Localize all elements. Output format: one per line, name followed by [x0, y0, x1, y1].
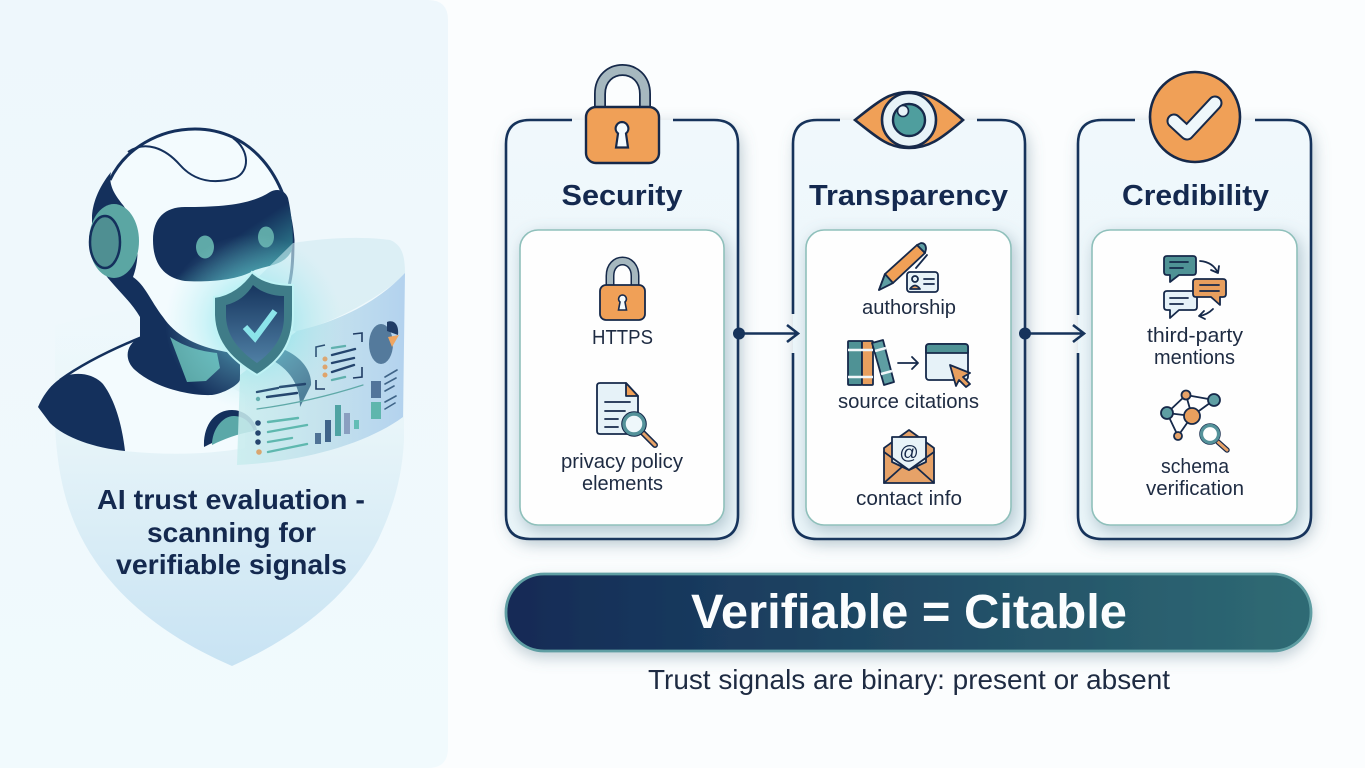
card: Transparency — [793, 92, 1025, 539]
arrow: transparency to credibility — [1019, 325, 1084, 342]
robot neck and back of head — [92, 172, 240, 395]
robot body — [62, 337, 245, 454]
robot head outline — [110, 129, 293, 290]
label: third-party — [1147, 325, 1243, 347]
icon: document with magnifier — [597, 383, 655, 445]
pie chart — [369, 321, 399, 364]
heading: Transparency — [809, 180, 1008, 212]
icon: eye — [855, 92, 963, 148]
caption — [97, 484, 365, 580]
robot eyes — [196, 236, 214, 258]
caption: AI trust evaluation - — [97, 484, 365, 515]
inner panel — [520, 230, 724, 525]
robot shoulder — [38, 374, 125, 451]
label: HTTPS — [592, 327, 653, 349]
robot earpiece — [89, 204, 139, 278]
icon: https lock — [600, 261, 645, 320]
mini tiles — [371, 381, 381, 398]
inner panel — [1092, 230, 1297, 525]
tagline: Trust signals are binary: present or absent — [648, 664, 1170, 695]
label: authorship — [862, 297, 956, 319]
shield glow — [165, 234, 341, 410]
label: privacy policy — [561, 451, 683, 473]
label: elements — [582, 473, 663, 495]
icon: trust shield with check — [214, 272, 293, 375]
arrow: security to transparency — [733, 325, 798, 342]
icon: pen and ID card — [879, 243, 938, 292]
robot head — [110, 129, 293, 370]
robot forearm — [272, 348, 311, 407]
robot neck teal — [170, 337, 220, 382]
label: contact info — [856, 488, 962, 510]
robot visor — [153, 190, 293, 281]
card frame — [1078, 120, 1311, 539]
label: verification — [1146, 478, 1244, 500]
label: mentions — [1154, 347, 1235, 369]
icon: padlock — [586, 70, 659, 163]
robot figure — [38, 129, 293, 454]
caption: scanning for — [147, 517, 316, 548]
holo beam — [235, 238, 405, 332]
card frame — [793, 120, 1025, 539]
icon: check badge — [1150, 72, 1240, 162]
icon: schema network with magnifier — [1161, 390, 1227, 450]
scan text lines — [257, 346, 397, 452]
card: Security — [506, 70, 738, 539]
holo screen — [237, 273, 405, 465]
inner panel — [806, 230, 1011, 525]
card: Credibility — [1078, 72, 1311, 539]
panel: AI trust evaluation — [0, 0, 448, 768]
card frame — [506, 120, 738, 539]
robot head seam — [128, 138, 246, 181]
holographic scan panel — [235, 238, 405, 465]
scan brackets — [316, 333, 362, 389]
left panel background — [0, 0, 448, 768]
heading: Credibility — [1122, 180, 1269, 212]
caption: verifiable signals — [116, 549, 347, 580]
icon: books to browser — [848, 340, 970, 387]
robot hand — [204, 410, 257, 447]
icon: chat bubbles — [1164, 256, 1226, 319]
banner: Verifiable = Citable: Verifiable = Citable — [691, 586, 1127, 639]
large background shield — [55, 294, 404, 666]
bar chart — [315, 405, 359, 444]
label: schema — [1161, 456, 1230, 478]
heading: Security — [562, 180, 682, 212]
icon: envelope — [884, 430, 934, 483]
icon: envelope: @ — [899, 443, 919, 464]
label: source citations — [838, 391, 979, 413]
banner: Verifiable = Citable — [506, 574, 1311, 651]
scan dots — [255, 356, 328, 455]
